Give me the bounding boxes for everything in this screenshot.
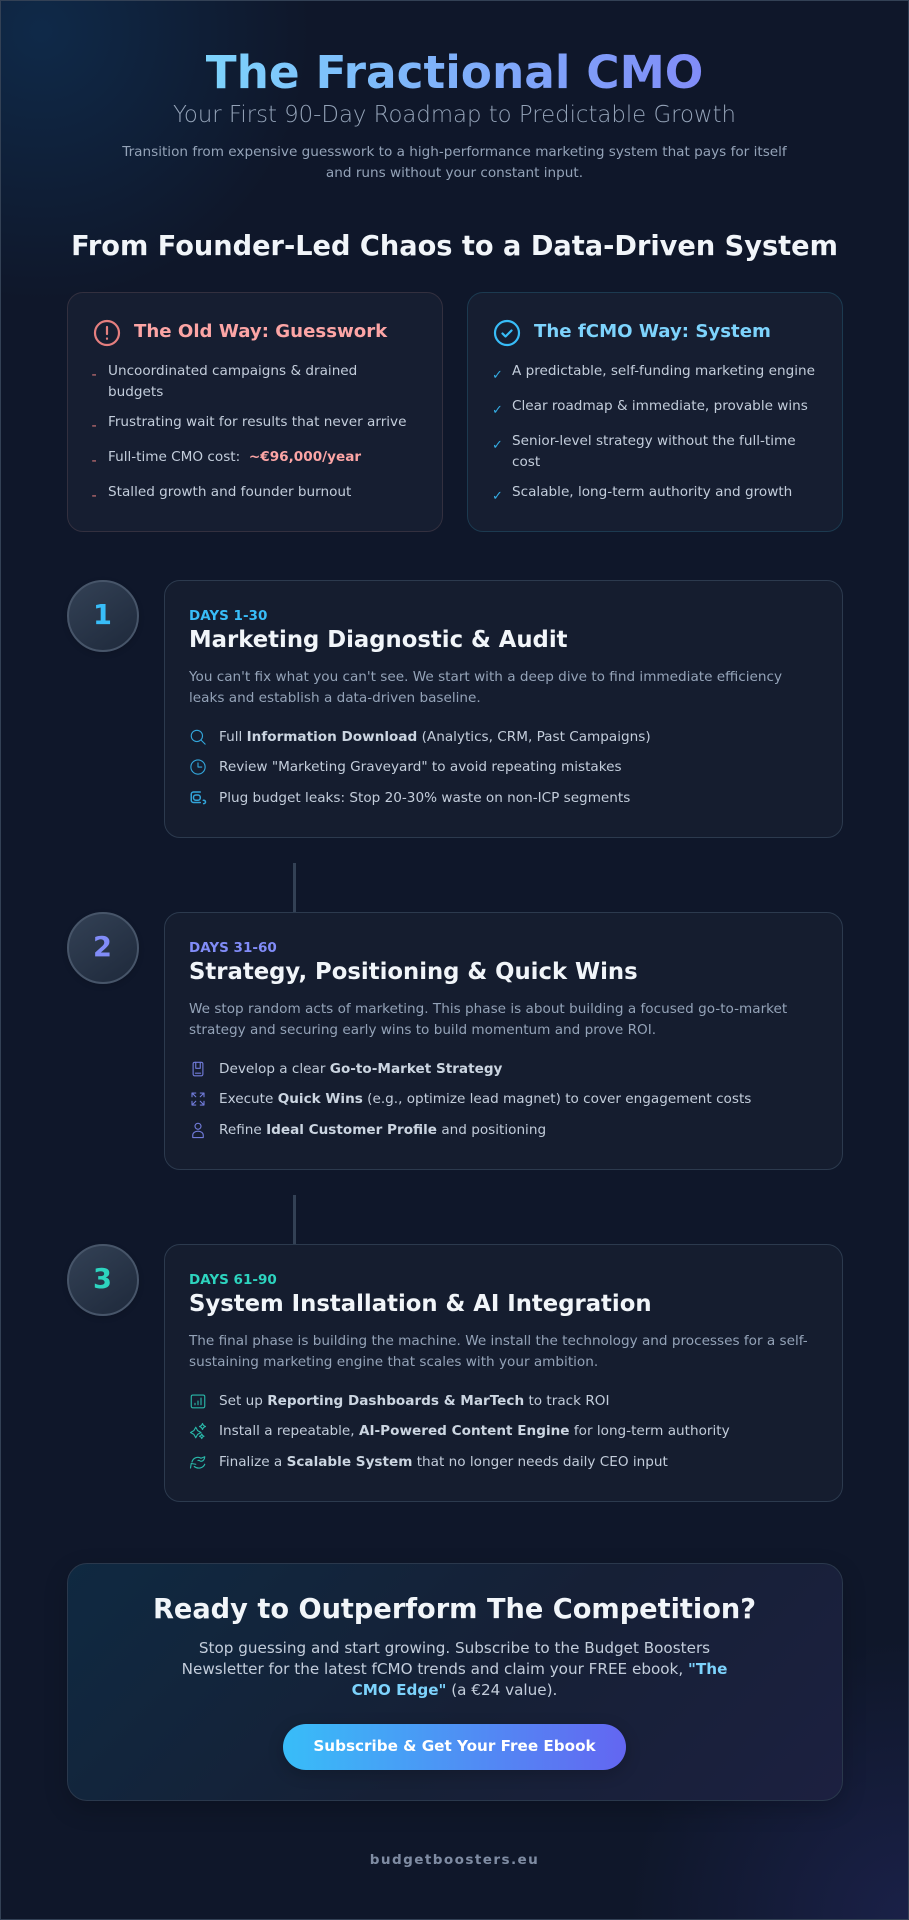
item: budget leak: Plug budget leaks: Stop 20-30% waste on non-ICP segments — [219, 790, 630, 806]
footer: budgetboosters.eu — [370, 1852, 539, 1868]
step description: leaks and establish a data-driven baseline. — [189, 690, 481, 706]
step description: strategy and securing early wins to build momentum and prove ROI. — [189, 1022, 656, 1038]
step description: sustaining marketing engine that scales with your ambition. — [189, 1354, 598, 1370]
item: expand arrows: Execute Quick Wins (e.g., optimize lead magnet) to cover engagement costs — [219, 1091, 751, 1107]
list: old way: Stalled growth and founder burnout — [108, 484, 351, 500]
list: fCMO way: ✓ — [492, 489, 503, 504]
list: fCMO way: Senior-level strategy without the full-time — [512, 433, 796, 449]
days label: DAYS 1-30 — [189, 608, 267, 624]
title: The Fractional CMO — [206, 46, 703, 99]
list: fCMO way: ✓ — [492, 403, 503, 418]
list: fCMO way: A predictable, self-funding marketing engine — [512, 363, 815, 379]
step 2 — [67, 912, 843, 1170]
step number 3 — [66, 1244, 138, 1316]
item: sparkles: Install a repeatable, AI-Powered Content Engine for long-term authority — [219, 1423, 730, 1439]
list: old way: budgets — [108, 384, 163, 400]
step number 2 — [66, 912, 138, 984]
CTA body: Stop guessing and start growing. Subscribe to the Budget Boosters — [199, 1639, 710, 1657]
days label: DAYS 31-60 — [189, 940, 277, 956]
step description — [189, 1001, 787, 1038]
icon: alert circle — [94, 320, 120, 346]
panel: step 1 — [164, 580, 843, 838]
step number 2: 2 — [93, 932, 112, 963]
step title: Marketing Diagnostic & Audit — [189, 627, 568, 653]
connector 2 — [293, 1195, 296, 1244]
heading: old way: The Old Way: Guesswork — [134, 321, 387, 342]
CTA body: CMO Edge" (a €24 value). — [352, 1681, 557, 1699]
list: fCMO way — [492, 363, 815, 504]
step 1 — [67, 580, 843, 838]
CTA body — [182, 1639, 727, 1699]
intro text — [122, 144, 787, 181]
CTA heading: Ready to Outperform The Competition? — [153, 1594, 756, 1625]
section heading: From Founder-Led Chaos to a Data-Driven System — [71, 231, 838, 262]
item: user: Refine Ideal Customer Profile and positioning — [219, 1122, 546, 1138]
step 3 — [67, 1244, 843, 1502]
list: old way: - — [92, 418, 97, 434]
list: fCMO way: Clear roadmap & immediate, provable wins — [512, 398, 808, 414]
list: old way: Uncoordinated campaigns & drained — [108, 363, 357, 379]
step description — [188, 1333, 808, 1370]
step number 1 — [66, 580, 138, 652]
item: book: Develop a clear Go-to-Market Strategy — [219, 1061, 502, 1077]
list: old way: - — [92, 367, 97, 383]
panel: step 3 — [164, 1244, 843, 1502]
item: chart: Set up Reporting Dashboards & MarTech to track ROI — [219, 1393, 609, 1409]
list: fCMO way: ✓ — [492, 438, 503, 453]
item: clock: Review "Marketing Graveyard" to avoid repeating mistakes — [219, 759, 622, 775]
step description — [189, 669, 782, 706]
list: fCMO way: ✓ — [492, 368, 503, 383]
intro text: Transition from expensive guesswork to a high-performance marketing system that pays for itself — [122, 144, 787, 160]
step title: Strategy, Positioning & Quick Wins — [189, 959, 638, 985]
step description: You can't fix what you can't see. We start with a deep dive to find immediate efficiency — [189, 669, 782, 685]
subtitle: Your First 90-Day Roadmap to Predictable Growth — [173, 102, 736, 128]
list: old way: Frustrating wait for results that never arrive — [108, 414, 406, 430]
CTA button — [283, 1724, 626, 1770]
step title: System Installation & AI Integration — [189, 1291, 652, 1317]
step description: The final phase is building the machine. We install the technology and processes for a self- — [189, 1333, 808, 1349]
panel: fCMO way — [466, 292, 843, 532]
panel: old way — [66, 292, 443, 532]
connector 1 — [293, 863, 296, 912]
days label: DAYS 61-90 — [189, 1272, 277, 1288]
item: search: Full Information Download (Analytics, CRM, Past Campaigns) — [219, 729, 651, 745]
heading: fCMO way: The fCMO Way: System — [534, 321, 771, 342]
list: fCMO way: cost — [512, 454, 540, 470]
CTA body: Newsletter for the latest fCMO trends and claim your FREE ebook, "The — [182, 1660, 727, 1678]
step number 1: 1 — [93, 600, 112, 631]
list: old way: Full-time CMO cost: ~€96,000/year — [108, 449, 361, 465]
list: old way: - — [92, 453, 97, 469]
list: fCMO way: Scalable, long-term authority and growth — [512, 484, 792, 500]
panel: call to action — [66, 1563, 843, 1801]
step number 3: 3 — [93, 1264, 112, 1295]
step description: We stop random acts of marketing. This phase is about building a focused go-to-market — [189, 1001, 787, 1017]
panel: step 2 — [164, 912, 843, 1170]
list: old way: - — [92, 488, 97, 504]
intro text: and runs without your constant input. — [326, 165, 583, 181]
icon: check circle — [494, 320, 520, 346]
item: refresh: Finalize a Scalable System that no longer needs daily CEO input — [219, 1454, 668, 1470]
CTA button: Subscribe & Get Your Free Ebook — [313, 1737, 596, 1755]
list: old way — [92, 363, 406, 504]
